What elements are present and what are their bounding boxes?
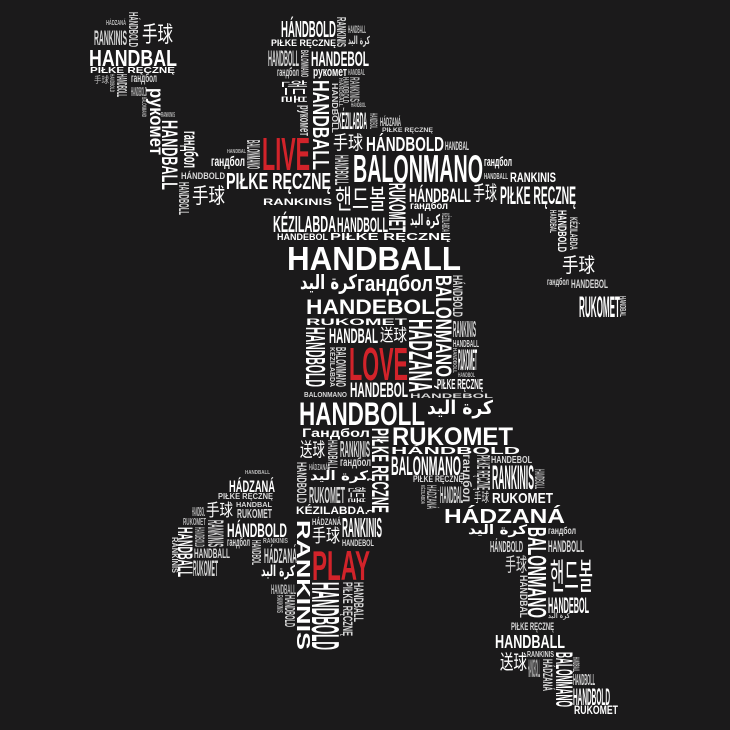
panel: torso words: HANDEBOL — [306, 296, 435, 319]
panel: outstretched arm words: HANDBAL — [618, 296, 627, 317]
panel: hips and thigh words: KÉZILABDA. — [296, 504, 368, 517]
heading word: HANDBOLL: HANDBOLL — [299, 396, 425, 432]
panel: raised hand and forearm words: BALONMANO — [140, 97, 147, 117]
panel: hips and thigh words: HÁDZANÁ — [309, 463, 328, 472]
panel: shoulder and upper chest words: HÁNDBOLD — [366, 133, 444, 156]
panel: head and neck words: كرة اليد — [348, 34, 370, 47]
panel: raised hand and forearm words: HANDBOLL — [113, 74, 130, 97]
panel: head and neck words: HANDBAL — [348, 68, 365, 77]
panel: front leg and foot words: كرة اليد — [548, 612, 571, 620]
panel: hips and thigh words: Гандбол — [302, 426, 370, 440]
panel: head and neck words: HANDBOLL — [268, 46, 299, 71]
panel: front leg and foot words: HÁNDBOLD — [490, 537, 523, 556]
panel: hips and thigh words: HÁDZANÁ — [312, 517, 341, 528]
panel: raised hand and forearm words — [89, 12, 452, 243]
panel: hips and thigh words: HANDEBOL — [491, 455, 532, 466]
panel: torso words: HANDBOLD — [300, 327, 331, 387]
panel: raised hand and forearm words: KÉZILABDA — [273, 210, 336, 237]
panel: raised hand and forearm words: HANDBOLL — [175, 182, 192, 215]
panel: raised hand and forearm words: HANDEBOL — [277, 232, 328, 243]
panel: shoulder and upper chest words: 핸드볼 — [335, 185, 386, 215]
panel: shoulder and upper chest words: HANDBOLL — [330, 155, 351, 185]
handball player silhouette word cloud: HANDBALL — [348, 24, 366, 36]
panel: raised back leg words: HANDBOL — [249, 540, 263, 565]
panel: head and neck words: HANDBALL — [337, 78, 343, 108]
panel: raised back leg words: HANDBALL — [194, 545, 230, 561]
panel: outstretched arm words — [484, 154, 627, 324]
panel: hips and thigh words: RANKINIS — [340, 436, 370, 462]
panel: hips and thigh words: 手球 — [312, 526, 340, 546]
panel: raised back leg words: 手球 — [206, 501, 233, 520]
panel: front leg and foot words: HÁDZANÁ — [540, 659, 556, 691]
panel: raised back leg words: гандбол — [227, 537, 250, 549]
heading word: HÁDZANÁ: HÁDZANÁ — [444, 505, 565, 528]
panel: hips and thigh words: BALONMANO — [391, 451, 461, 481]
panel: shoulder and upper chest words: гандбол — [410, 200, 448, 212]
panel: raised back leg words: RANKINIS — [263, 538, 288, 545]
handball player silhouette word cloud: RANKINIS — [453, 316, 476, 342]
panel: front leg and foot words: كرة اليد — [468, 523, 528, 538]
panel: torso words — [287, 240, 494, 432]
panel: head and neck words: RANKINIS — [334, 17, 349, 47]
panel: torso words: كرة اليد — [427, 397, 494, 419]
handball player silhouette word cloud: HANDBALL — [271, 581, 296, 597]
panel: hips and thigh words: HÁNDBOLD — [391, 444, 520, 457]
panel: outstretched arm words: HANDBALL — [484, 172, 508, 181]
panel: torso words: BALONMANO — [304, 392, 348, 399]
panel: hips and thigh words: RUKOMET — [309, 482, 345, 508]
panel: hips and thigh words: RUKOMET — [392, 423, 513, 451]
panel: hips and thigh words: 手球 — [474, 490, 489, 505]
red word: PLAY: PLAY — [312, 542, 370, 589]
panel: hips and thigh words: PIŁKE RĘCZNĘ — [473, 455, 493, 490]
panel: outstretched arm words: KÉZILABDA — [567, 217, 580, 250]
panel: raised back leg words: RANKINIS — [170, 537, 180, 573]
panel: torso words: HANDBAL — [329, 325, 378, 348]
panel: torso words: BALONMANO — [332, 347, 349, 387]
handball player silhouette word cloud: RUKOMET — [383, 183, 410, 232]
panel: raised hand and forearm words: PIŁKE RĘCZNĘ — [90, 65, 175, 75]
panel: hips and thigh words: HANDBOLL — [532, 469, 548, 489]
panel: torso words: كرة اليد — [300, 270, 357, 294]
panel: outstretched arm words: PIŁKE RĘCZNĘ — [500, 182, 576, 210]
panel: front leg and foot words: HANDBOLL — [528, 655, 540, 683]
panel: head and neck words: RANKINIS — [347, 77, 363, 102]
panel: raised back leg words: HANDBOLD — [192, 527, 208, 547]
panel: raised hand and forearm words: 手球 — [142, 22, 173, 47]
panel: hips and thigh words: HANDBOLD — [294, 462, 310, 503]
panel: shoulder and upper chest words: HANDBAL — [445, 139, 469, 153]
panel: raised hand and forearm words: RANKINIS — [263, 197, 332, 208]
panel: raised back leg words: RUKOMET — [237, 507, 272, 521]
panel: front leg and foot words: HANDEBOL — [548, 593, 589, 618]
panel: raised back leg words: HÁDZANÁ — [229, 477, 275, 496]
panel: head and neck words: PIŁKE RĘCZNĘ — [271, 38, 336, 49]
panel: hips and thigh words: PIŁKE RĘCZNĘ — [366, 428, 393, 513]
panel: hips and thigh words: RANKINIS — [342, 512, 382, 543]
panel: raised hand and forearm words: BALONMANO — [243, 140, 263, 169]
panel: raised hand and forearm words: HANDBOLD — [131, 84, 147, 99]
panel: torso words: PIŁKE RĘCZNĘ — [437, 376, 483, 393]
panel: shoulder and upper chest words: 手球 — [473, 182, 497, 205]
panel: planted lower leg words: HANDBALL — [351, 582, 367, 622]
panel: shoulder and upper chest words: KÉZILABDA — [338, 107, 367, 135]
panel: raised back leg words: HÁNDBOLD — [227, 520, 287, 542]
panel: torso words: HANDEBOL — [350, 379, 408, 402]
panel: head and neck words: HANDBOLD — [341, 77, 351, 103]
panel: raised hand and forearm words: HÁDZANÁ — [106, 18, 126, 27]
panel: raised hand and forearm words: рукомет — [145, 88, 166, 155]
panel: planted lower leg words: RANKINIS — [293, 520, 313, 650]
heading word: BALONMANO: BALONMANO — [353, 148, 483, 191]
panel: hips and thigh words: KÉZILABDA — [419, 485, 427, 504]
panel: front leg and foot words: RANKINIS — [527, 650, 554, 659]
panel: raised back leg words: RANKINIS — [203, 520, 228, 547]
panel: front leg and foot words: BALONMANO — [522, 527, 552, 618]
panel: head and neck words: HÁNDBOLD — [281, 15, 336, 42]
panel: outstretched arm words: HANDBAL — [547, 210, 558, 233]
panel: raised hand and forearm words: PIŁKE RĘCZNĘ — [226, 168, 331, 194]
panel: shoulder and upper chest words — [330, 107, 497, 232]
panel: raised back leg words: PIŁKE RĘCZNĘ — [218, 492, 274, 501]
panel: shoulder and upper chest words: HÁNDBALL — [409, 185, 471, 207]
panel: shoulder and upper chest words: 手球 — [333, 132, 363, 154]
panel: raised back leg words — [170, 470, 298, 627]
panel: front leg and foot words: HANDBOLL — [573, 672, 595, 689]
panel: head and neck words: HANDBALL — [308, 80, 334, 170]
panel: outstretched arm words: HANDEBOL — [571, 277, 608, 291]
panel: torso words: HANDBOL — [458, 373, 475, 379]
panel: hips and thigh words: HANDBALL — [325, 440, 341, 470]
panel: torso words: HÁNDBOLD — [450, 275, 466, 317]
handball player silhouette word cloud: RUKOMET — [458, 344, 477, 377]
heading word: HANDBAL: HANDBAL — [89, 45, 177, 71]
handball player silhouette word cloud: RANKINIS — [492, 459, 534, 497]
panel: raised back leg words: RUKOMET — [193, 556, 218, 581]
panel: raised hand and forearm words: гандбол — [179, 131, 200, 168]
panel: outstretched arm words: гандбол — [484, 154, 512, 169]
panel: raised back leg words: HANDBALL — [173, 527, 196, 577]
panel: raised hand and forearm words: HANDBOLD — [108, 74, 115, 92]
panel: head and neck words: гандбол — [277, 65, 299, 79]
panel: front leg and foot words: 手球 — [505, 554, 527, 576]
panel: front leg and foot words: HANDBALL — [570, 657, 581, 672]
panel: hips and thigh words — [294, 423, 553, 549]
panel: raised hand and forearm words: RANKINIS — [94, 27, 127, 50]
panel: hips and thigh words: гандбол — [340, 457, 371, 469]
panel: torso words: 送球 — [380, 326, 407, 345]
panel: shoulder and upper chest words: PIŁKE RĘCZNĘ — [382, 127, 434, 134]
panel: raised hand and forearm words: 手球 — [94, 74, 109, 85]
panel: raised hand and forearm words: RANKINIS — [161, 112, 175, 119]
panel: raised back leg words: كرة اليد — [261, 562, 295, 580]
panel: raised hand and forearm words: PIŁKE RĘCZNĘ — [330, 232, 452, 243]
panel: front leg and foot words — [444, 505, 618, 717]
panel: hips and thigh words: 핸드볼 — [345, 487, 367, 503]
handball player silhouette word cloud: HANDEBOL — [311, 48, 369, 71]
panel: planted lower leg words — [293, 520, 370, 650]
panel: head and neck words: 핸드볼 — [278, 80, 309, 103]
panel: raised back leg words: HANDBALL — [245, 470, 271, 476]
panel: front leg and foot words: RUKOMET — [574, 705, 618, 717]
panel: raised hand and forearm words: HANDBOLL — [337, 214, 388, 237]
panel: hips and thigh words: HANDBAL — [440, 482, 463, 509]
panel: torso words: HANDEBOL — [410, 394, 494, 400]
panel: raised hand and forearm words: LIVE — [262, 128, 310, 180]
panel: hips and thigh words: гандбол — [460, 454, 474, 502]
panel: outstretched arm words: RANKINIS — [510, 170, 556, 185]
handball player silhouette word cloud: HÁDZANÁ — [264, 545, 297, 568]
panel: torso words: гандбол — [357, 271, 433, 296]
panel: hips and thigh words: كرة اليد — [310, 469, 368, 484]
panel: front leg and foot words: HANDBOLL — [548, 537, 584, 556]
panel: raised back leg words: RANKINIS — [275, 595, 285, 613]
panel: torso words: HANDBOLL — [451, 348, 457, 374]
panel: front leg and foot words: 핸드볼 — [550, 556, 593, 597]
panel: raised back leg words: HANDBOL — [192, 505, 205, 519]
panel: raised hand and forearm words: гандбол — [131, 71, 157, 85]
panel: front leg and foot words: HANDBALL — [495, 632, 565, 652]
panel: torso words: HANDBALL — [453, 339, 479, 350]
panel: raised hand and forearm words: 手球 — [192, 185, 225, 208]
panel: torso words: HÁDZANÁ — [402, 319, 439, 392]
panel: outstretched arm words: 手球 — [562, 254, 595, 277]
panel: front leg and foot words: HANDBAL — [517, 575, 529, 618]
panel: raised hand and forearm words: HANDBALL — [157, 120, 182, 190]
handball player silhouette word cloud: RUKOMET — [579, 291, 620, 324]
panel: front leg and foot words: 送球 — [500, 651, 527, 674]
panel: head and neck words: BALONMANO — [298, 50, 310, 77]
panel: front leg and foot words: гандбол — [548, 525, 576, 537]
panel: hips and thigh words: HÁDZANÁ — [424, 485, 440, 509]
panel: raised back leg words: HANDBAL — [236, 502, 273, 509]
panel: torso words: LOVE — [349, 338, 408, 390]
panel: head and neck words: рукомет — [313, 64, 347, 79]
panel: front leg and foot words: PIŁKE RĘCZNĘ — [511, 621, 554, 633]
handball player silhouette word cloud: KÉZILABDA — [439, 213, 452, 232]
heading word: HANDBALL: HANDBALL — [287, 240, 461, 277]
panel: raised hand and forearm words: гандбол — [211, 153, 245, 169]
panel: torso words: BALONMANO — [431, 275, 456, 377]
panel: shoulder and upper chest words: HANDBOL — [367, 113, 379, 129]
panel: head and neck words — [268, 15, 370, 170]
panel: torso words: KÉZILABDA — [328, 347, 337, 387]
panel: head and neck words: рукомет — [296, 105, 313, 136]
panel: shoulder and upper chest words: كرة اليد — [410, 211, 440, 229]
panel: shoulder and upper chest words: HÁDZANÁ — [380, 114, 401, 129]
panel: outstretched arm words: гандбол — [547, 276, 569, 288]
panel: planted lower leg words: PIŁKE RĘCZNĘ — [340, 582, 356, 636]
panel: raised back leg words: RUKOMET — [183, 517, 206, 528]
panel: hips and thigh words: 送球 — [300, 439, 325, 461]
handball player silhouette word cloud: HANDBOLD — [573, 684, 610, 711]
panel: torso words: RUKOMET — [306, 317, 407, 328]
panel: hips and thigh words: HANDEBOL — [342, 538, 374, 549]
panel: outstretched arm words: HANDBOLD — [555, 210, 569, 252]
panel: raised hand and forearm words: HANDBAL — [227, 149, 246, 155]
panel: head and neck words: HANDBOLL — [330, 83, 340, 133]
panel: hips and thigh words: PIŁKE RĘCZNĘ — [413, 474, 463, 484]
handball player silhouette word cloud: HANDBOLD — [281, 595, 298, 627]
panel: hips and thigh words: RUKOMET — [492, 490, 553, 507]
panel: raised hand and forearm words: HÁNDBOLD — [126, 12, 141, 47]
panel: raised hand and forearm words: HÁNDBOLD — [181, 171, 225, 182]
panel: head and neck words: HANDBOL — [351, 103, 366, 109]
